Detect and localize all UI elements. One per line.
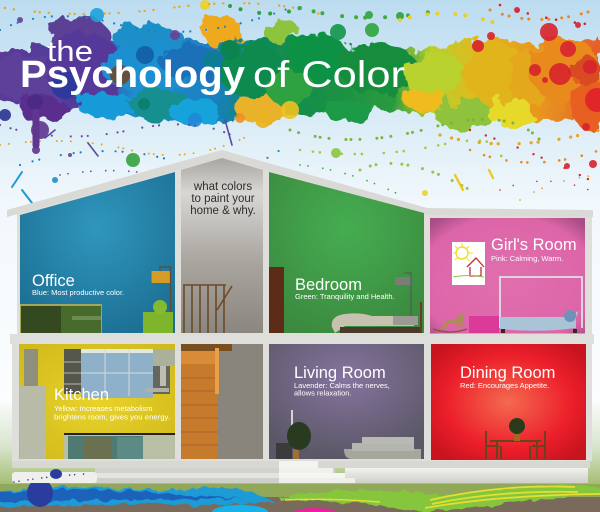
living room label: Living Room <box>294 364 386 382</box>
ground <box>0 484 600 512</box>
panel: lower stairwell <box>181 344 263 459</box>
icon: banister <box>183 285 232 333</box>
house <box>7 150 594 483</box>
panel: girl's room <box>430 218 585 334</box>
icon: plant and sofa <box>276 410 421 459</box>
girl's room label: Girl's Room <box>491 236 577 254</box>
title: Psychology <box>20 54 245 96</box>
icon: child's drawing <box>452 242 485 285</box>
title: the <box>47 36 93 68</box>
icon: wooden stairs <box>181 344 232 459</box>
icon: table and plant <box>486 418 545 459</box>
paint spills <box>0 479 600 512</box>
girl's room label <box>491 236 577 263</box>
callout: what colors: to paint your <box>191 193 255 205</box>
bedroom label: Green: Tranquility and Health. <box>295 292 395 301</box>
kitchen label: Yellow: Increases metabolism <box>54 404 153 413</box>
paint splatter band <box>0 0 600 203</box>
panel: office <box>20 172 175 333</box>
office label <box>32 272 124 297</box>
dining room label: Red: Encourages Appetite. <box>460 381 549 390</box>
panel: dining room <box>431 344 586 460</box>
kitchen label: brightens room, gives you energy. <box>54 412 170 422</box>
icon: office furniture <box>20 267 173 333</box>
panel: living room <box>269 344 424 459</box>
panel: bedroom <box>269 172 424 333</box>
girl's room label: Pink: Calming, Warm. <box>491 254 563 263</box>
scattered droplets <box>0 3 600 203</box>
office label: Office <box>32 272 75 290</box>
living room label: Lavender: Calms the nerves, <box>294 381 390 390</box>
panel: upper stairwell <box>181 158 263 333</box>
panel: kitchen <box>19 344 175 459</box>
icon: bedroom furniture <box>269 267 422 333</box>
bedroom label <box>295 276 395 301</box>
floor slab <box>10 334 594 344</box>
foundation and steps <box>12 461 590 483</box>
icon: crib and rocking horse <box>433 277 582 333</box>
office label: Blue: Most productive color. <box>32 288 124 297</box>
dining room label <box>460 364 555 390</box>
dining room label: Dining Room <box>460 364 555 382</box>
callout: what colors: what colors <box>193 181 252 193</box>
kitchen label: Kitchen <box>54 386 109 404</box>
house walls <box>12 155 592 461</box>
title <box>20 36 405 96</box>
bedroom label: Bedroom <box>295 276 362 294</box>
icon: kitchen units <box>20 349 175 459</box>
title: of Color <box>253 54 405 95</box>
living room label <box>294 364 390 398</box>
living room label: allows relaxation. <box>294 388 352 398</box>
callout: what colors: home & why. <box>190 205 256 217</box>
kitchen label <box>54 386 170 422</box>
roof <box>7 150 593 217</box>
darker overlay blots <box>0 0 600 196</box>
